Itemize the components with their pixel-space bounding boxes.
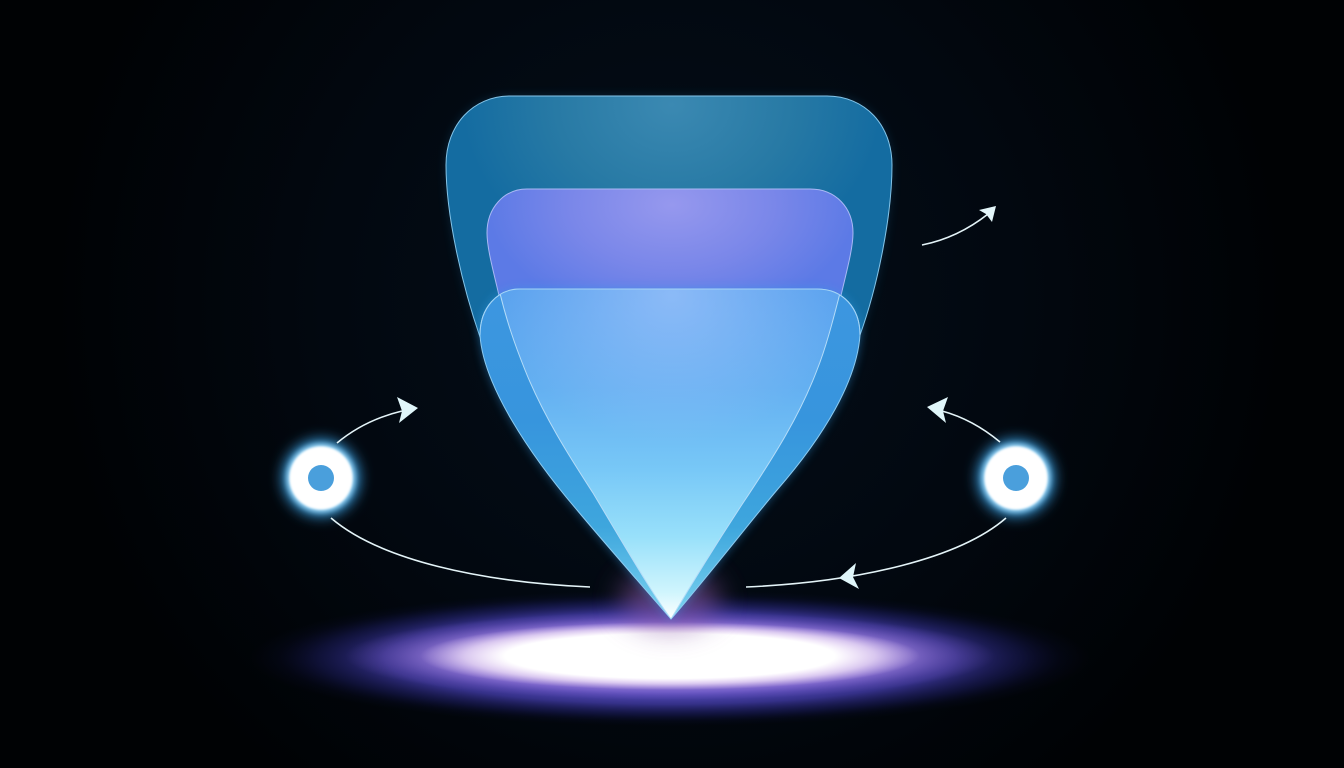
arrow: right node up to shield xyxy=(927,397,1000,442)
layered shield xyxy=(446,96,892,619)
arrow: upper right xyxy=(922,206,996,245)
layer: front wing xyxy=(480,289,860,619)
arrow: right node curve toward tip xyxy=(746,518,1006,589)
layer: middle shield xyxy=(487,189,853,300)
icon: right node xyxy=(978,440,1054,516)
arrow: left node up to shield xyxy=(337,397,418,443)
layer: front inner cone xyxy=(498,285,842,619)
layer: outer shield xyxy=(446,96,892,500)
arrow: left node curve toward tip xyxy=(331,518,590,587)
icon: left node xyxy=(283,440,359,516)
glowing light pool xyxy=(250,570,1090,726)
front top edge highlight xyxy=(480,289,860,335)
